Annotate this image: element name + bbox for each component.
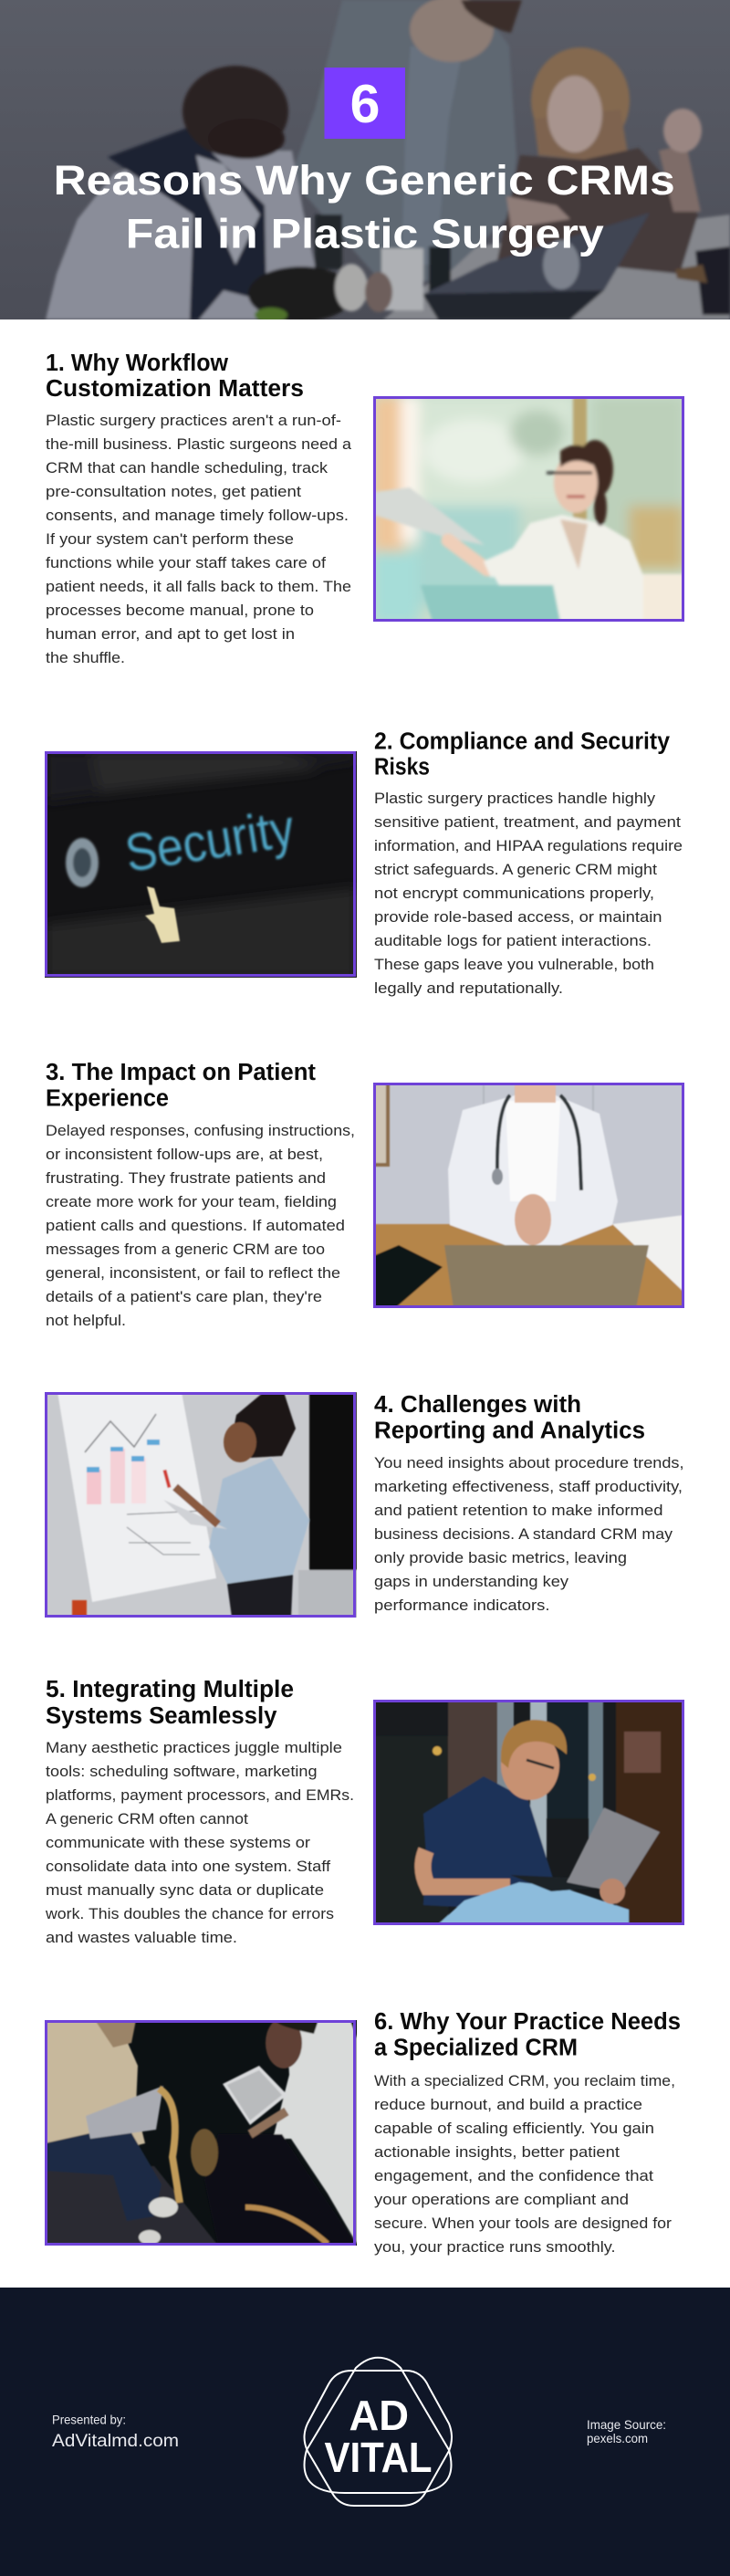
photo: two people meeting with laptop and tablet xyxy=(45,2017,357,2246)
body text 2: legally and reputationally. xyxy=(374,980,563,997)
body text 4: performance indicators. xyxy=(374,1597,549,1614)
logo wordmark xyxy=(325,2392,433,2481)
heading 2: Risks xyxy=(374,754,430,780)
photo: woman handing over a document xyxy=(373,396,684,624)
image source: pexels.com xyxy=(587,2431,648,2445)
body text 1: the-mill business. Plastic surgeons need a xyxy=(46,436,352,453)
photo: woman presenting charts on a whiteboard xyxy=(45,1392,357,1618)
body text 6: reduce burnout, and build a practice xyxy=(374,2097,642,2113)
body text 1: pre-consultation notes, get patient xyxy=(46,484,301,500)
body text 2: These gaps leave you vulnerable, both xyxy=(374,957,654,973)
body text 6: secure. When your tools are designed for xyxy=(374,2215,673,2232)
panel: section 4 xyxy=(45,1392,684,1618)
panel: section 5 xyxy=(45,1677,684,1946)
photo: security on a screen with hand cursor: Security xyxy=(121,799,298,884)
body text 5: tools: scheduling software, marketing xyxy=(46,1764,318,1780)
body text 5: and wastes valuable time. xyxy=(46,1930,237,1946)
body text 6: With a specialized CRM, you reclaim time, xyxy=(374,2073,675,2089)
body text 2: strict safeguards. A generic CRM might xyxy=(374,862,657,878)
body text 4: only provide basic metrics, leaving xyxy=(374,1550,627,1566)
body text 6: capable of scaling efficiently. You gain xyxy=(374,2120,654,2137)
body text 4: You need insights about procedure trends, xyxy=(374,1455,684,1471)
body text 1: Plastic surgery practices aren't a run-of- xyxy=(46,413,341,429)
logo triangle pointing down xyxy=(305,2371,452,2506)
title xyxy=(54,157,675,257)
heading 1: Customization Matters xyxy=(46,376,304,402)
body text 4: marketing effectiveness, staff productivity, xyxy=(374,1479,683,1495)
presented by: Presented by: xyxy=(52,2412,126,2426)
panel: section 3 xyxy=(46,1060,684,1329)
panel: section 2 xyxy=(45,728,683,997)
logo wordmark: VITAL xyxy=(325,2434,433,2481)
heading 3: Experience xyxy=(46,1086,169,1112)
body text 3: patient calls and questions. If automated xyxy=(46,1218,345,1234)
heading 2: 2. Compliance and Security xyxy=(374,728,671,754)
body text 1: processes become manual, prone to xyxy=(46,602,314,619)
heading 1 xyxy=(46,351,304,402)
body text 3 xyxy=(46,1123,355,1329)
title: Fail in Plastic Surgery xyxy=(126,210,604,257)
heading 5: 5. Integrating Multiple xyxy=(46,1677,294,1702)
title: Reasons Why Generic CRMs xyxy=(54,157,675,204)
logo triangle pointing up xyxy=(305,2358,451,2493)
heading 6: a Specialized CRM xyxy=(374,2036,578,2061)
heading 6: 6. Why Your Practice Needs xyxy=(374,2009,681,2035)
body text 2: sensitive patient, treatment, and payment xyxy=(374,814,681,831)
body text 6 xyxy=(374,2073,675,2256)
body text 6: you, your practice runs smoothly. xyxy=(374,2239,615,2256)
number badge: 6 xyxy=(350,74,380,134)
heading 2 xyxy=(374,728,671,780)
body text 1: the shuffle. xyxy=(46,650,125,666)
panel: section 1 xyxy=(46,351,684,666)
body text 4: business decisions. A standard CRM may xyxy=(374,1526,673,1543)
body text 3: general, inconsistent, or fail to reflect the xyxy=(46,1265,340,1282)
heading 4: Reporting and Analytics xyxy=(374,1419,645,1444)
body text 5: consolidate data into one system. Staff xyxy=(46,1859,330,1875)
body text 2: auditable logs for patient interactions. xyxy=(374,933,652,949)
body text 1: CRM that can handle scheduling, track xyxy=(46,460,328,476)
photo: security on a screen with hand cursor xyxy=(45,751,357,978)
body text 5: communicate with these systems or xyxy=(46,1835,311,1851)
body text 6: engagement, and the confidence that xyxy=(374,2168,653,2184)
hero photo: three colleagues around a laptop xyxy=(0,0,730,319)
body text 2 xyxy=(374,791,683,997)
body text 2: Plastic surgery practices handle highly xyxy=(374,791,656,807)
heading 3 xyxy=(46,1060,317,1112)
body text 2: not encrypt communications properly, xyxy=(374,885,654,902)
heading 6 xyxy=(374,2009,681,2061)
body text 4 xyxy=(374,1455,684,1614)
hero banner xyxy=(0,0,730,322)
body text 2: information, and HIPAA regulations require xyxy=(374,838,683,854)
image source: Image Source: xyxy=(587,2417,666,2432)
body text 1: patient needs, it all falls back to them. The xyxy=(46,579,351,595)
body text 1: functions while your staff takes care of xyxy=(46,555,326,571)
body text 5: must manually sync data or duplicate xyxy=(46,1882,324,1899)
logo wordmark: AD xyxy=(349,2392,409,2439)
heading 4 xyxy=(374,1392,645,1444)
body text 2: provide role-based access, or maintain xyxy=(374,909,662,926)
presented by xyxy=(52,2412,179,2451)
body text 3: messages from a generic CRM are too xyxy=(46,1241,325,1258)
photo: man typing on a laptop outdoors xyxy=(373,1700,684,1925)
body text 6: actionable insights, better patient xyxy=(374,2144,620,2161)
panel: section 6 xyxy=(45,2009,681,2256)
body text 5: A generic CRM often cannot xyxy=(46,1811,248,1827)
number badge xyxy=(325,68,405,139)
body text 5: platforms, payment processors, and EMRs. xyxy=(46,1787,354,1804)
photo: doctor at a desk with laptop xyxy=(373,1083,684,1308)
body text 1 xyxy=(46,413,352,666)
heading 5 xyxy=(46,1677,294,1729)
body text 3: or inconsistent follow-ups are, at best, xyxy=(46,1147,323,1163)
body text 4: gaps in understanding key xyxy=(374,1574,569,1590)
body text 5 xyxy=(45,1740,354,1946)
footer xyxy=(0,2288,730,2576)
logo: AD VITAL xyxy=(305,2358,452,2506)
body text 3: not helpful. xyxy=(46,1313,126,1329)
body text 5: Many aesthetic practices juggle multiple xyxy=(46,1740,342,1756)
heading 4: 4. Challenges with xyxy=(374,1392,581,1418)
body text 3: details of a patient's care plan, they're xyxy=(46,1289,322,1305)
body text 1: human error, and apt to get lost in xyxy=(46,626,295,643)
body text 1: If your system can't perform these xyxy=(46,531,294,548)
body text 3: frustrating. They frustrate patients and xyxy=(46,1170,326,1187)
heading 1: 1. Why Workflow xyxy=(46,351,228,376)
heading 5: Systems Seamlessly xyxy=(46,1703,277,1729)
body text 4: and patient retention to make informed xyxy=(374,1503,662,1519)
body text 3: Delayed responses, confusing instructions, xyxy=(46,1123,355,1139)
image source xyxy=(587,2417,666,2445)
body text 3: create more work for your team, fielding xyxy=(46,1194,337,1210)
presented by: AdVitalmd.com xyxy=(52,2432,179,2451)
body text 6: your operations are compliant and xyxy=(374,2192,629,2208)
heading 3: 3. The Impact on Patient xyxy=(46,1060,317,1085)
body text 5: work. This doubles the chance for errors xyxy=(45,1906,334,1922)
body text 1: consents, and manage timely follow-ups. xyxy=(46,508,349,524)
